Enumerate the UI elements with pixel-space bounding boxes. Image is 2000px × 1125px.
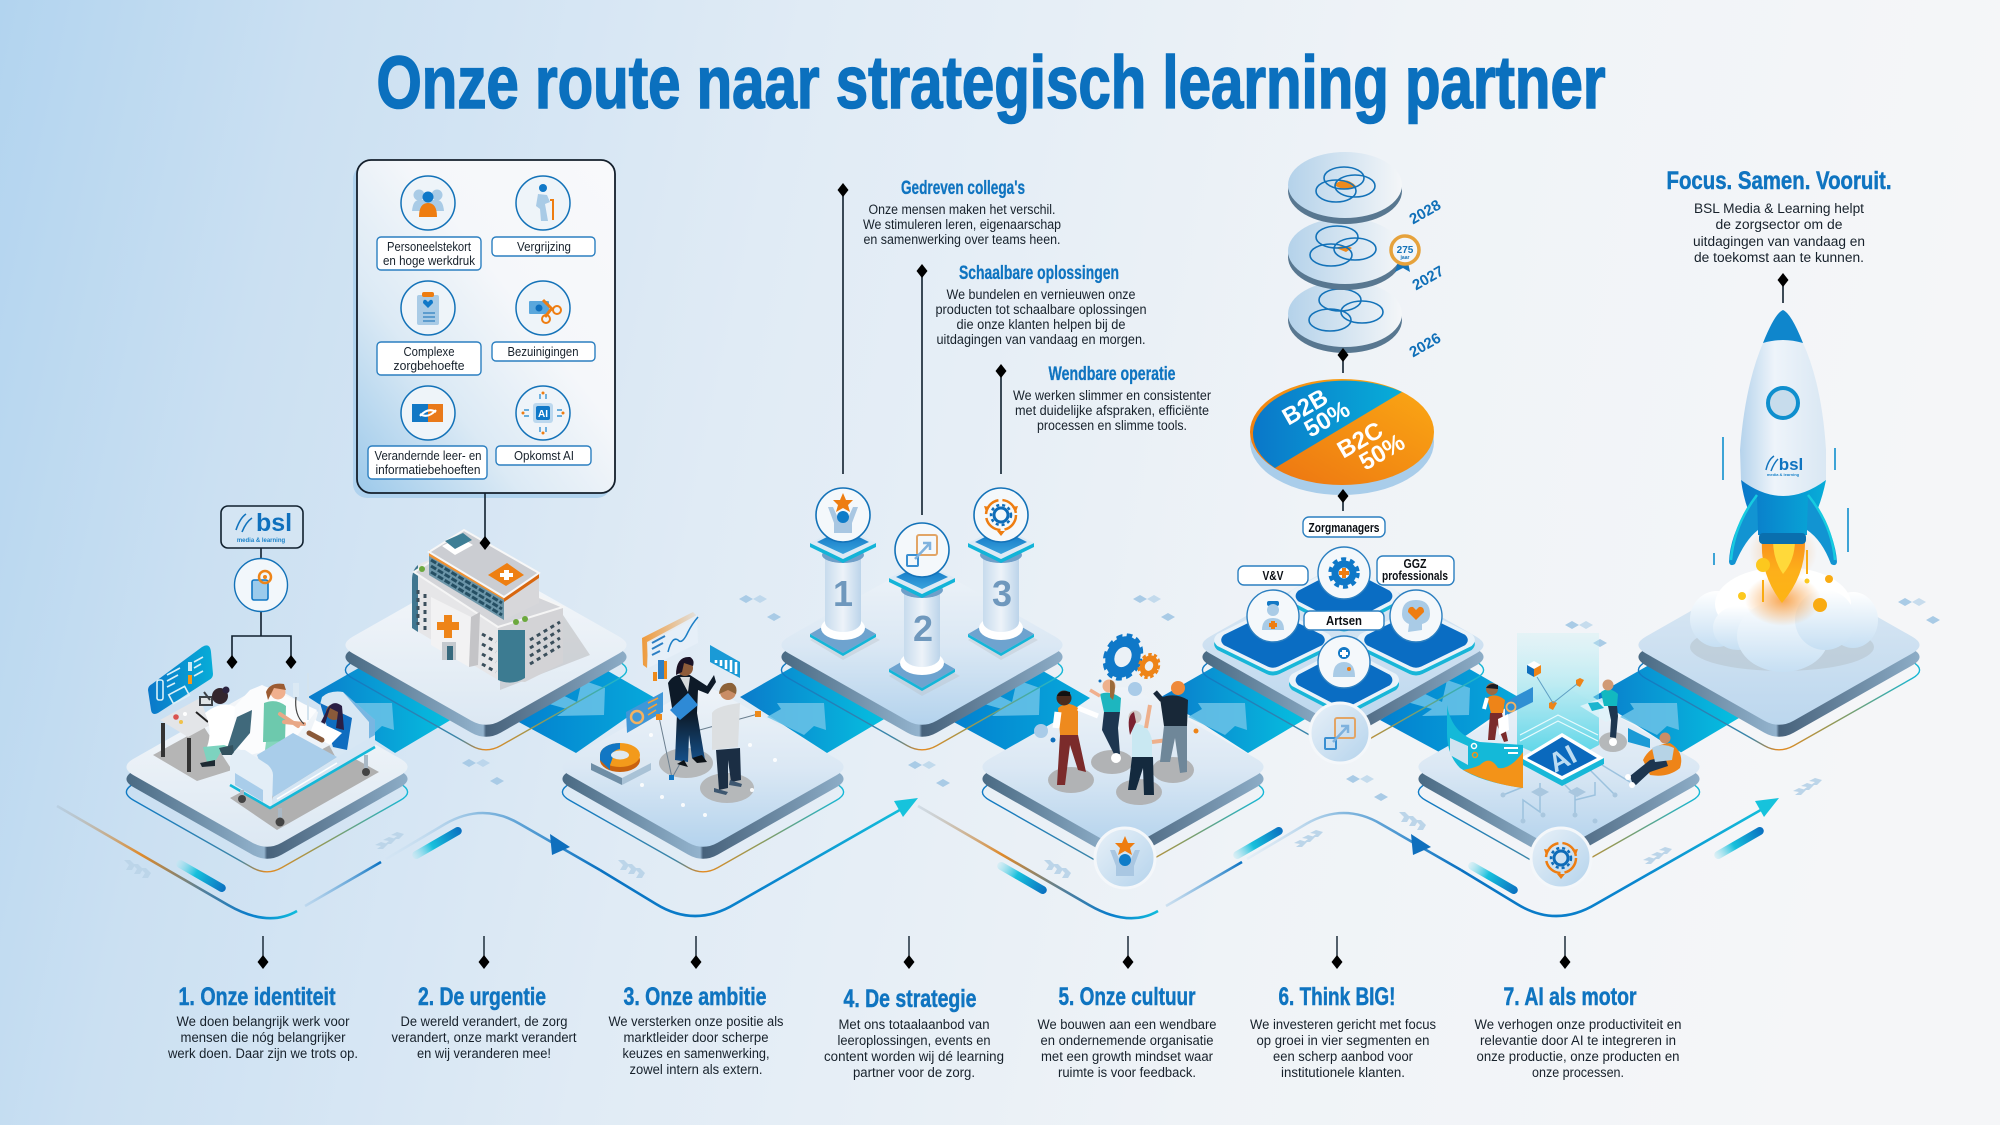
label: staff shortage: Personeelstekort [387,240,471,254]
step 5 text: ruimte is voor feedback. [1058,1065,1196,1080]
text: agile operation [1013,364,1211,433]
platform 5 [982,687,1264,859]
text: agile operation: Wendbare operatie [1048,364,1176,385]
text: scalable solutions: Schaalbare oplossingen [959,263,1119,284]
winding route line, first section [57,798,918,918]
text: agile operation: met duidelijke afspraken, efficiënte [1015,403,1209,418]
connector from logo to the scene [226,548,296,669]
connector discs to pie [1338,348,1348,373]
pie: B2B B2C split [1250,379,1434,495]
text: focus together forward: de zorgsector om de [1716,217,1842,232]
icon: changing information needs [401,386,455,440]
scene: AI engine: AI [1544,739,1581,778]
step 5 text: 5. Onze cultuur [1058,983,1196,1011]
round icon: people with star [1095,828,1155,888]
icon: heart and mind [1390,590,1442,642]
label: rise of AI [496,446,591,465]
connector lines to strategy pillars [838,183,1006,515]
icon: nurse [1247,590,1299,642]
label: staff shortage [377,237,481,270]
label: changing information needs [368,446,487,479]
connector text to rocket [1778,273,1788,303]
step 6 text: een scherp aanbod voor [1273,1049,1413,1064]
step 1 text [167,983,358,1061]
pillar 2: 2 [913,608,933,649]
connector pie to target groups [1338,489,1348,511]
step 4 text: partner voor de zorg. [853,1065,975,1080]
badge: 275 years: 275 [1397,245,1414,256]
step 4 text: Met ons totaalaanbod van [838,1017,990,1032]
round icon: gear cycle [1531,828,1591,888]
route connectors with arrows [308,665,1739,753]
step 6 text: 6. Think BIG! [1278,983,1396,1011]
icon: rise of AI [516,386,570,440]
step 7 text: relevantie door AI te integreren in [1480,1033,1676,1048]
step 4 text: leeroplossingen, events en [838,1033,990,1048]
text: scalable solutions: We bundelen en vernieuwen onze [946,287,1136,302]
text: agile operation: We werken slimmer en consistenter [1013,388,1211,403]
chevrons along the route [124,778,1822,878]
connector from panel to hospital [480,493,490,550]
step 2 text: en wij veranderen mee! [417,1046,551,1061]
label: complex care needs: Complexe [404,345,455,359]
scene: AI engine [1447,0,1681,824]
step 3 text: zowel intern als extern. [630,1062,762,1077]
scene: pillars of the strategy [810,488,1038,696]
disc 2026 [1288,281,1402,353]
small decorative diamonds [462,595,1940,801]
step 5 text: met een growth mindset waar [1041,1049,1213,1064]
icon: phone with idea [234,558,288,612]
label: nurses: V&V [1262,568,1284,583]
pie: B2B B2C split: B2B [1278,384,1333,431]
pillar 3: 3 [992,573,1012,614]
text: scalable solutions: uitdagingen van vandaag en morgen. [936,332,1146,347]
step 4 text [824,985,1004,1080]
scene: rocket launch: bsl [1779,455,1803,474]
label: budget cuts: Bezuinigingen [508,345,579,359]
step 7 text [1474,983,1682,1080]
pillar 3 [968,488,1034,656]
icon: gear with plus [1318,547,1370,599]
label: ageing [492,237,595,256]
round icon: shared growth on strategy route [1310,703,1370,763]
step 1 text: mensen die nóg belangrijker [180,1030,346,1045]
label: nurses [1238,566,1308,585]
text: focus together forward: Focus. Samen. Vooruit. [1666,167,1892,195]
label: ageing: Vergrijzing [517,240,571,254]
step 1 text: 1. Onze identiteit [178,983,336,1011]
step 5 text: We bouwen aan een wendbare [1038,1017,1216,1032]
scene: ambition team with charts [591,612,777,817]
step 4 text: 4. De strategie [844,985,977,1013]
accent bars along the route [175,826,1765,895]
label: mental health professionals: GGZ [1404,556,1427,571]
platform 6 [1202,565,1484,737]
bsl logo box: media & learning [237,538,286,544]
bsl logo box [221,506,303,548]
label: complex care needs [377,342,481,375]
step 5 text: en ondernemende organisatie [1040,1033,1214,1048]
label: changing information needs: Verandernde leer- en [374,449,482,463]
text: driven colleagues: We stimuleren leren, eigenaarschap [863,217,1061,232]
step 5 text [1038,983,1216,1080]
scene: culture team with gears [1034,630,1198,805]
badge: 275 years [1391,236,1419,272]
badge: 275 years: jaar [1400,255,1409,261]
step 7 text: We verhogen onze productiviteit en [1474,1017,1682,1032]
step 6 text: institutionele klanten. [1281,1065,1405,1080]
text: focus together forward [1666,167,1892,265]
pie: B2B B2C split: B2C [1333,417,1388,464]
panel: urgency factors [353,160,615,498]
platform outline loops [126,590,1920,872]
text: driven colleagues: Onze mensen maken het verschil. [868,202,1056,217]
text: agile operation: processen en slimme tools. [1037,418,1187,433]
step 6 text [1250,983,1436,1080]
platform 3 [562,687,844,859]
label: rise of AI: Opkomst AI [514,449,574,463]
scene: lab and hospital bed [148,645,379,830]
step 7 text: onze processen. [1532,1065,1624,1080]
platform 1 [126,687,408,859]
scene: target group tiles [1214,564,1475,716]
label: care managers [1303,517,1385,537]
text: focus together forward: BSL Media & Learning helpt [1694,201,1864,216]
step 1 text: werk doen. Daar zijn we trots op. [167,1046,358,1061]
step 2 text: 2. De urgentie [418,983,546,1011]
label: staff shortage: en hoge werkdruk [383,254,476,268]
text: scalable solutions: die onze klanten helpen bij de [956,317,1126,332]
disc 2027 [1288,218,1402,290]
step 2 text [392,983,577,1061]
step 7 text: 7. AI als motor [1504,983,1637,1011]
label: doctors: Artsen [1326,613,1362,628]
disc 2028 [1288,152,1402,224]
label: mental health professionals [1377,556,1454,585]
step 3 text: 3. Onze ambitie [624,983,767,1011]
step 3 text: keuzes en samenwerking, [622,1046,770,1061]
platform 4 [781,565,1063,737]
label: doctors [1304,611,1384,630]
step 7 text: onze productie, onze producten en [1476,1049,1680,1064]
step 6 text: We investeren gericht met focus [1250,1017,1436,1032]
icon: budget cuts [516,281,570,335]
label: changing information needs: informatiebehoeften [376,463,481,477]
label: budget cuts [492,342,595,361]
label: complex care needs: zorgbehoefte [394,359,465,373]
scene: hospital building [412,530,590,690]
step 6 text: op groei in vier segmenten en [1256,1033,1430,1048]
step 2 text: verandert, onze markt verandert [392,1030,577,1045]
winding route line, second section [918,798,1779,918]
year labels: 2026 [1407,330,1444,361]
step 3 text: marktleider door scherpe [624,1030,768,1045]
year labels: 2027 [1410,263,1447,294]
bsl logo box: bsl [256,509,292,537]
label: care managers: Zorgmanagers [1308,520,1380,535]
pillar 1 [810,488,876,656]
text: driven colleagues [863,178,1061,247]
icon: doctor [1318,636,1370,688]
scene: rocket launch [1690,310,1878,672]
step 3 text: We versterken onze positie als [608,1014,784,1029]
pie: B2B B2C split: 50% [1300,396,1355,443]
icon: ageing [516,176,570,230]
text: driven colleagues: en samenwerking over teams heen. [864,232,1060,247]
icon: complex care needs [401,281,455,335]
text: scalable solutions [936,263,1146,347]
platform 2 [345,565,627,737]
scene: rocket launch: media & learning [1767,472,1800,477]
year labels [1407,197,1447,361]
step 3 text [608,983,784,1077]
step 4 text: content worden wij dé learning [824,1049,1004,1064]
pie: B2B B2C split: 50% [1355,429,1410,476]
icon: staff shortage [401,176,455,230]
stacked year discs [1288,152,1402,353]
connector lines to step texts [258,936,1570,969]
platform 7 [1418,687,1700,859]
platform 8 [1638,565,1920,737]
text: focus together forward: de toekomst aan te kunnen. [1694,250,1864,265]
pillar 2 [889,523,955,691]
pillar 1: 1 [833,573,853,614]
text: focus together forward: uitdagingen van vandaag en [1693,234,1865,249]
text: driven colleagues: Gedreven collega's [901,178,1025,199]
text: scalable solutions: producten tot schaalbare oplossingen [936,302,1146,317]
step 1 text: We doen belangrijk werk voor [176,1014,350,1029]
icon: rise of AI: AI [538,409,548,420]
label: mental health professionals: professionals [1382,568,1448,583]
year labels: 2028 [1407,197,1444,228]
title: Onze route naar strategisch learning partner [376,41,1606,124]
step 2 text: De wereld verandert, de zorg [400,1014,568,1029]
